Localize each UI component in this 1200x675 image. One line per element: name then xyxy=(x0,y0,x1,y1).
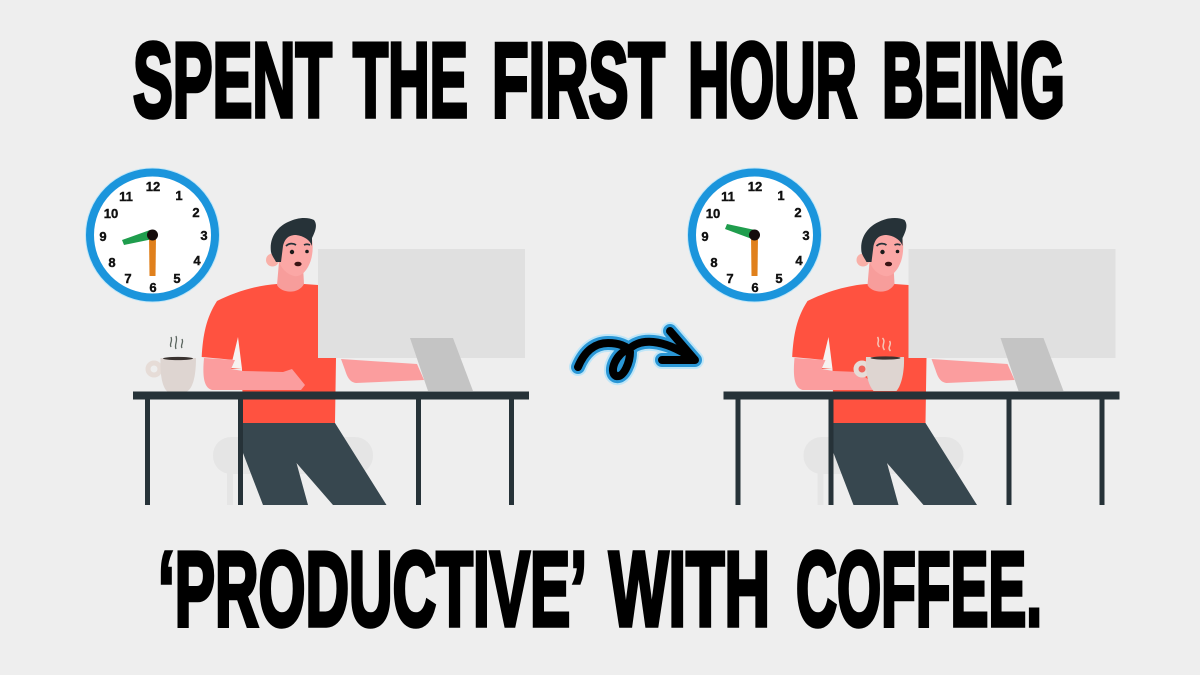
left clock showing early time: 3 xyxy=(200,228,208,243)
left clock showing early time: 5 xyxy=(173,271,181,286)
title: top line: SPENT xyxy=(133,22,332,140)
left clock showing early time: 6 xyxy=(149,280,157,295)
left clock showing early time: 8 xyxy=(108,255,116,270)
title: bottom line: WITH xyxy=(609,530,770,648)
right clock showing later time: 12 xyxy=(748,179,762,194)
desk xyxy=(724,392,1120,505)
left clock showing early time: 10 xyxy=(104,206,118,221)
monitor xyxy=(908,249,1116,358)
left clock showing early time: 4 xyxy=(193,253,201,268)
desk xyxy=(133,392,529,505)
right clock showing later time: 4 xyxy=(795,253,803,268)
laptop xyxy=(410,338,473,391)
right clock showing later time: 3 xyxy=(802,228,810,243)
left clock showing early time: 1 xyxy=(175,188,183,203)
title: top line: THE xyxy=(353,22,468,140)
right clock showing later time: 8 xyxy=(710,255,718,270)
right clock showing later time: 2 xyxy=(794,205,802,220)
person xyxy=(792,218,1014,505)
left clock showing early time xyxy=(85,168,220,302)
left clock showing early time: 12 xyxy=(146,179,160,194)
right clock showing later time: 10 xyxy=(706,206,720,221)
chair xyxy=(804,437,964,505)
right clock showing later time xyxy=(687,168,822,302)
right clock showing later time: 6 xyxy=(751,280,759,295)
laptop xyxy=(1000,338,1064,391)
right clock showing later time: 9 xyxy=(701,229,709,244)
person xyxy=(202,218,424,505)
title: bottom line: ‘PRODUCTIVE’ xyxy=(158,530,587,648)
title: top line: FIRST xyxy=(492,22,665,140)
head xyxy=(266,218,316,276)
arrow pointing from left scene to right scene xyxy=(578,331,695,376)
coffee cup xyxy=(148,336,196,394)
left illustration: person at desk with coffee on the table xyxy=(133,218,529,505)
left clock showing early time: 11 xyxy=(119,189,133,204)
left clock showing early time: 9 xyxy=(99,229,107,244)
coffee cup held in hand xyxy=(856,337,904,391)
chair xyxy=(213,437,373,505)
right clock showing later time: 5 xyxy=(775,271,783,286)
right clock showing later time: 11 xyxy=(721,189,735,204)
head xyxy=(856,218,906,276)
right clock showing later time: 1 xyxy=(777,188,785,203)
monitor xyxy=(318,249,525,358)
title: top line xyxy=(133,22,1065,140)
left clock showing early time: 2 xyxy=(192,205,200,220)
left clock showing early time: 7 xyxy=(124,271,132,286)
right clock showing later time: 7 xyxy=(726,271,734,286)
right illustration: person at desk holding coffee xyxy=(724,218,1120,505)
title: top line: HOUR xyxy=(688,22,857,140)
